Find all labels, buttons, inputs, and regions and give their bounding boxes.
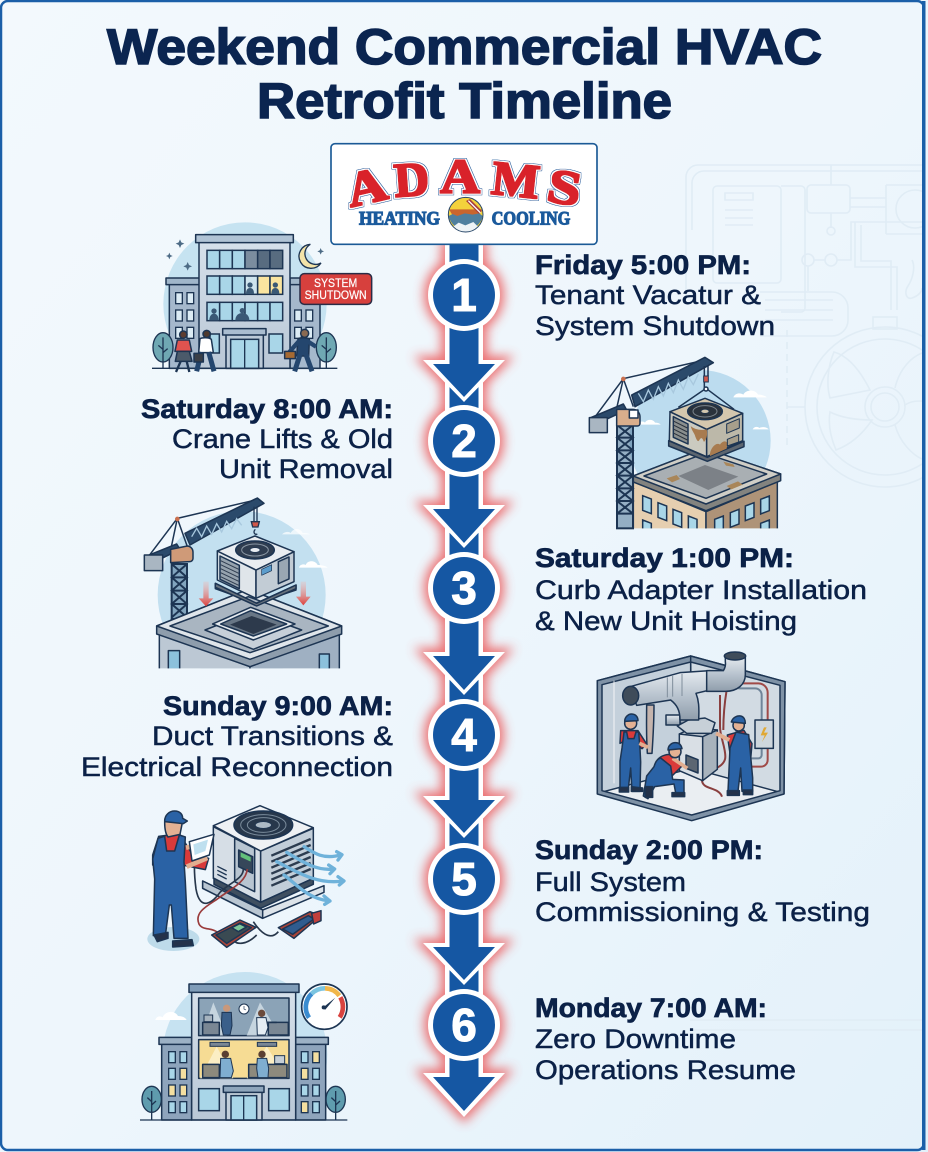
logo wordmark ADAMS: D bbox=[392, 153, 431, 208]
walking figures bbox=[175, 329, 316, 372]
text: step 5: Full System bbox=[535, 867, 686, 897]
ground line bbox=[152, 366, 337, 370]
new unit bbox=[215, 536, 296, 606]
text: step 2 bbox=[141, 394, 393, 484]
text: step 4: Sunday 9:00 AM: bbox=[163, 691, 393, 721]
logo subline: HEATING bbox=[359, 209, 440, 230]
step badge 2: 2 bbox=[451, 415, 477, 467]
illustration: crane placing new unit on curb adapter bbox=[144, 498, 342, 679]
text: step 3: & New Unit Hoisting bbox=[535, 606, 797, 636]
text: step 4: Duct Transitions & bbox=[152, 721, 393, 751]
illustration: crane lifting rusty old unit bbox=[589, 357, 781, 534]
building windows bbox=[643, 496, 769, 534]
logo wordmark ADAMS: M bbox=[489, 151, 542, 209]
test leads bbox=[194, 859, 278, 943]
clouds bbox=[638, 391, 769, 429]
furnace unit bbox=[679, 727, 717, 781]
multimeter bbox=[212, 920, 256, 947]
red glow behind arrows bbox=[423, 244, 505, 1117]
wing windows bbox=[169, 1052, 319, 1113]
ground line bbox=[140, 1118, 347, 1122]
illustration: tenants leaving building at shutdown bbox=[152, 222, 372, 386]
title: Retrofit Timeline bbox=[257, 73, 672, 129]
descent arrows bbox=[199, 582, 213, 606]
text: step 6: Monday 7:00 AM: bbox=[535, 993, 767, 1023]
unit base bbox=[203, 881, 324, 918]
logo globe emblem bbox=[448, 197, 483, 232]
text: step 6: Zero Downtime bbox=[535, 1024, 736, 1054]
clouds bbox=[282, 529, 328, 568]
timeline arrow column bbox=[423, 244, 505, 1117]
airflow arrows bbox=[277, 847, 344, 904]
windows bbox=[207, 250, 283, 321]
clamp meter bbox=[278, 911, 321, 938]
upper floor room bbox=[199, 998, 289, 1036]
step badge 4: 4 bbox=[451, 709, 477, 761]
crane jib bbox=[185, 498, 264, 545]
stars and moon bbox=[166, 239, 324, 271]
backdrop circle bbox=[158, 512, 326, 622]
step badge 6 bbox=[428, 989, 500, 1061]
logo wordmark ADAMS: S bbox=[543, 158, 586, 217]
technician standing left bbox=[619, 714, 648, 792]
text: step 1 bbox=[535, 250, 775, 341]
crane tower bbox=[594, 360, 705, 528]
floor shadow bbox=[147, 927, 199, 951]
performance gauge bbox=[302, 984, 347, 1029]
logo subline: COOLING bbox=[492, 209, 570, 230]
lower floor room bbox=[199, 1040, 289, 1078]
system shutdown callout bbox=[300, 274, 372, 304]
technician kneeling bbox=[643, 743, 687, 799]
logo subline bbox=[359, 209, 570, 230]
trees bbox=[142, 1086, 345, 1120]
text: step 5: Sunday 2:00 PM: bbox=[535, 835, 763, 865]
title bbox=[107, 19, 822, 129]
logo wordmark ADAMS: A bbox=[341, 157, 392, 218]
step badge 4 bbox=[428, 699, 500, 771]
text: step 2: Crane Lifts & Old bbox=[172, 424, 393, 454]
crane jib bbox=[632, 357, 713, 407]
system shutdown callout: SHUTDOWN bbox=[305, 289, 367, 302]
arrowheads bbox=[423, 340, 505, 1117]
left hanging strap bbox=[646, 705, 654, 753]
arrow shaft bbox=[445, 244, 483, 1084]
illustration: technicians in mechanical room bbox=[597, 652, 785, 821]
backdrop circle bbox=[630, 370, 771, 474]
background blueprint schematic bbox=[685, 164, 922, 488]
step badge 5 bbox=[428, 843, 500, 915]
technician standing right bbox=[716, 716, 753, 795]
cloud bbox=[155, 1012, 187, 1020]
logo wordmark ADAMS bbox=[341, 151, 586, 218]
step badge 3 bbox=[428, 552, 500, 624]
step badge 6: 6 bbox=[451, 999, 477, 1051]
text: step 3: Saturday 1:00 PM: bbox=[535, 543, 794, 573]
text: step 4: Electrical Reconnection bbox=[81, 752, 393, 782]
text: step 1: System Shutdown bbox=[535, 311, 775, 341]
rooftop building bbox=[157, 589, 342, 671]
step badge 1: 1 bbox=[451, 269, 477, 321]
ductwork bbox=[623, 652, 746, 733]
text: step 5: Commissioning & Testing bbox=[535, 897, 870, 927]
main building bbox=[192, 992, 296, 1120]
trees bbox=[153, 333, 336, 368]
text: step 5 bbox=[535, 835, 870, 927]
main building bbox=[199, 242, 290, 368]
backdrop circle bbox=[163, 222, 326, 334]
condenser unit bbox=[213, 806, 313, 908]
entrance bbox=[226, 334, 263, 368]
title: Weekend Commercial HVAC bbox=[107, 19, 822, 75]
step badge 2 bbox=[428, 405, 500, 477]
text: step 2: Unit Removal bbox=[219, 454, 393, 484]
step badge 5: 5 bbox=[451, 853, 477, 905]
side wings bbox=[159, 1037, 328, 1120]
illustration: technician commissioning rooftop unit bbox=[147, 806, 344, 951]
logo panel bbox=[331, 144, 597, 244]
backdrop circle bbox=[164, 972, 328, 1064]
electrical conduit and panel bbox=[702, 683, 768, 797]
technician with tablet bbox=[153, 811, 214, 947]
side wings bbox=[166, 278, 320, 368]
text: step 3 bbox=[535, 543, 867, 636]
step badge 3: 3 bbox=[451, 562, 477, 614]
hook and slings bbox=[678, 366, 734, 409]
crane tower bbox=[148, 499, 258, 619]
system shutdown callout: SYSTEM bbox=[314, 277, 357, 290]
text: step 4 bbox=[81, 691, 393, 782]
step badge 1 bbox=[428, 259, 500, 331]
text: step 6 bbox=[535, 993, 796, 1085]
logo wordmark ADAMS: A bbox=[440, 151, 480, 204]
entrance and ground windows bbox=[199, 1086, 289, 1120]
text: step 2: Saturday 8:00 AM: bbox=[141, 394, 393, 424]
text: step 3: Curb Adapter Installation bbox=[535, 575, 867, 605]
crane hook bbox=[251, 507, 259, 534]
text: step 6: Operations Resume bbox=[535, 1055, 796, 1085]
rusty old unit bbox=[669, 398, 744, 461]
text: step 1: Tenant Vacatur & bbox=[535, 280, 761, 310]
illustration: office back in operation bbox=[140, 972, 347, 1137]
text: step 1: Friday 5:00 PM: bbox=[535, 250, 751, 280]
room walls bbox=[597, 656, 785, 821]
office occupants bbox=[209, 282, 279, 320]
building bbox=[634, 454, 782, 528]
